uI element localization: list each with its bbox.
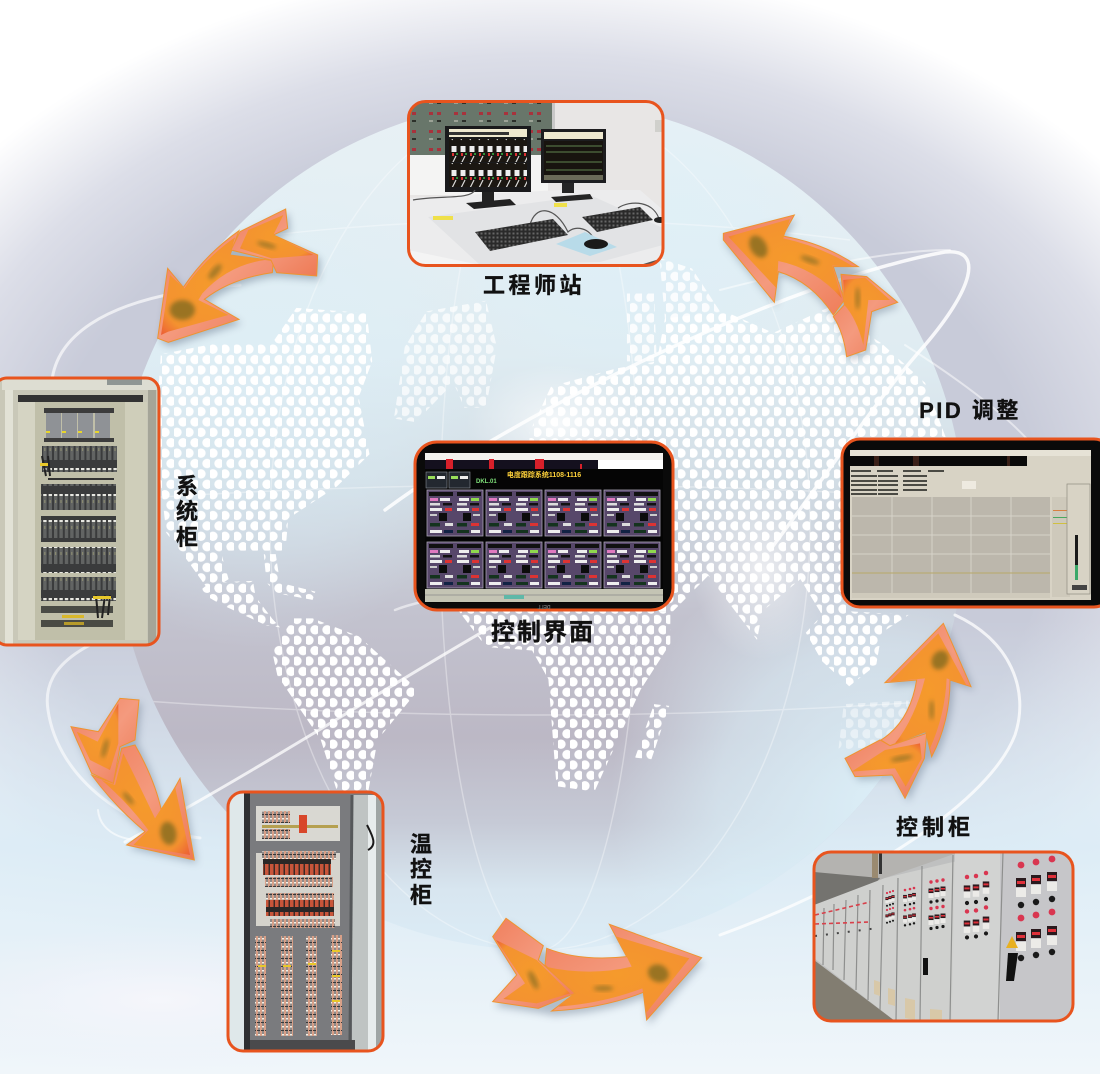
map: Australia <box>838 701 909 751</box>
label: system cabinet: 统 <box>176 499 198 524</box>
cables <box>413 190 660 240</box>
map: Arctic Asia <box>659 258 725 319</box>
map: Eurasia <box>529 308 947 686</box>
keyboard left <box>475 219 568 251</box>
warning handle <box>1006 953 1018 981</box>
label: temperature cabinet <box>410 832 432 908</box>
mouse <box>584 239 608 249</box>
screen title: 电度跟踪系统1108-1116 <box>507 470 581 479</box>
ceiling <box>816 854 955 880</box>
label: system cabinet <box>176 474 198 550</box>
arrow: right, control cabinet to PID <box>845 623 974 802</box>
indicator columns <box>1016 862 1026 961</box>
lower wire strips <box>255 935 342 1036</box>
map: North America <box>155 308 372 592</box>
map: Scandinavia <box>627 294 657 361</box>
desk <box>408 190 663 265</box>
label: system cabinet: 系 <box>176 474 198 499</box>
arrow: top left, engineer station to system cabinet <box>158 209 320 346</box>
middle red module section 2 <box>256 893 340 926</box>
map: Africa <box>459 611 670 792</box>
label: control interface: 控制界面 <box>491 619 595 646</box>
panel: system cabinet photo <box>0 378 159 645</box>
panel: control cabinet photo <box>814 851 1073 1021</box>
arrow: top right, PID to engineer station <box>723 215 900 361</box>
trend chart <box>852 497 1050 598</box>
label: engineer station: 工程师站 <box>483 273 585 298</box>
floor <box>814 960 895 1021</box>
map: Madagascar <box>635 704 669 759</box>
middle red module section 1 <box>256 853 340 894</box>
screen <box>425 453 663 603</box>
map: Central America <box>199 581 280 627</box>
label: PID tuning: PID 调整 <box>919 398 1021 423</box>
distant red indicators <box>815 902 870 924</box>
screen reading: DKL.01 <box>476 479 497 485</box>
label: temperature cabinet: 柜 <box>410 883 432 908</box>
dotted world map <box>155 258 947 800</box>
PID screen <box>850 450 1091 600</box>
panel: engineer station photo <box>408 101 666 266</box>
label: control cabinet: 控制柜 <box>896 815 974 840</box>
orbit lines <box>47 250 1050 935</box>
panel: PID monitor <box>842 439 1100 607</box>
globe sphere <box>133 118 956 949</box>
slider column <box>1067 484 1090 594</box>
ventilation plates <box>874 980 942 1021</box>
monitor left <box>445 126 531 192</box>
keyboard right <box>582 207 653 232</box>
power supplies <box>44 408 114 442</box>
label: temperature cabinet: 控 <box>410 857 432 882</box>
mouse pad <box>556 232 617 256</box>
label: temperature cabinet: 温 <box>410 832 432 857</box>
arrow: lower left, system cabinet to temperature cabinet <box>71 698 197 863</box>
panel: control interface monitor: DELL <box>537 605 551 611</box>
top terminal section <box>256 806 340 841</box>
monitor right <box>541 129 606 183</box>
panel: temperature cabinet photo <box>228 792 383 1051</box>
sparkle highlights <box>466 364 832 660</box>
label: system cabinet: 柜 <box>176 525 198 550</box>
rack rows <box>41 446 117 601</box>
map: South America <box>272 618 418 800</box>
arrow: bottom, temperature cabinet to control cabinet <box>493 918 704 1025</box>
cabinet row <box>816 862 955 1020</box>
map: Florida and Caribbean <box>264 554 315 600</box>
side legend <box>1052 497 1070 597</box>
parameter text rows <box>851 470 976 495</box>
panel: control interface monitor <box>415 442 673 611</box>
map: Greenland <box>394 301 497 422</box>
